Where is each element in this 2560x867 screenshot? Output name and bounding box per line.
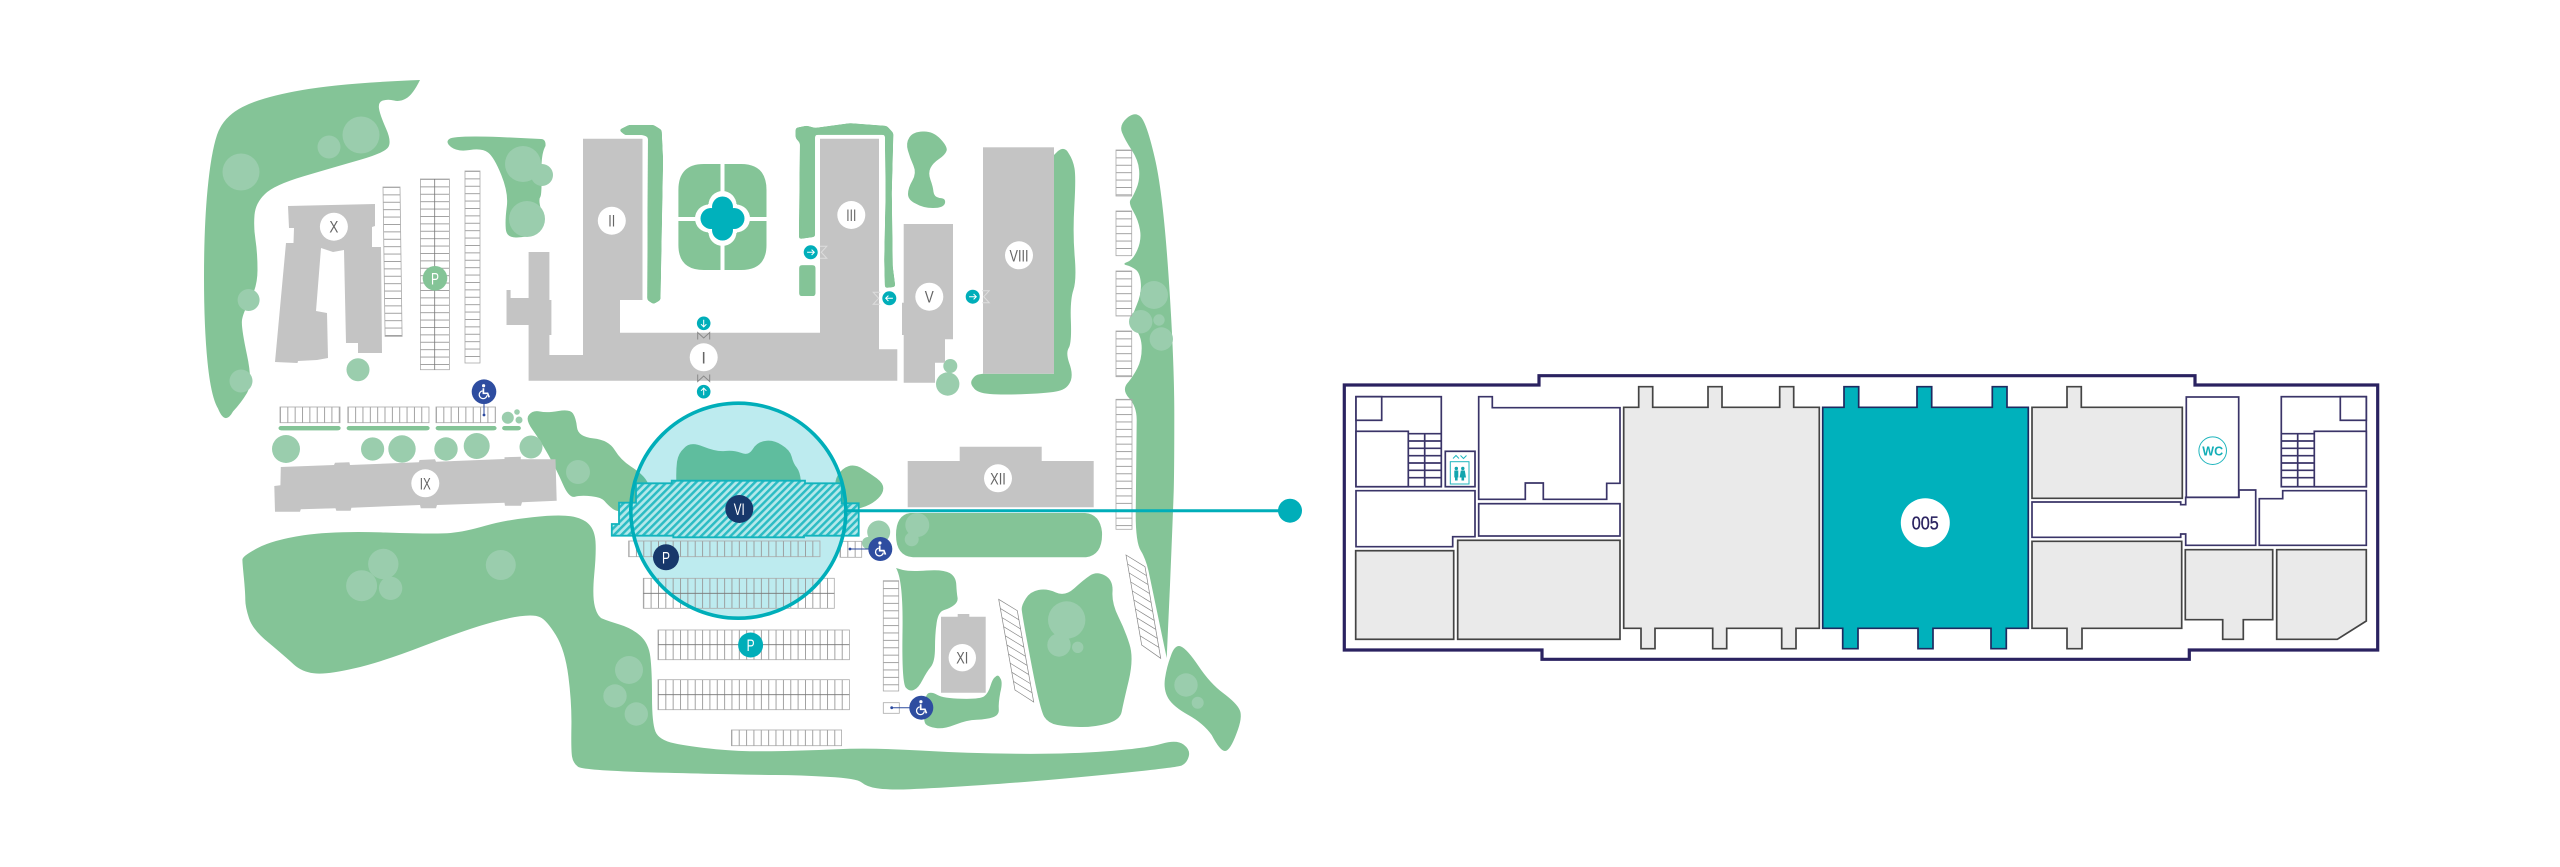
gate: south of building I — [697, 316, 710, 330]
WC label: WC — [2202, 444, 2223, 458]
green seen through the highlight circle — [633, 440, 844, 502]
parking lot east 5 — [1116, 399, 1132, 529]
highlight circle outline — [631, 403, 846, 618]
thin green strips — [278, 123, 895, 430]
label X — [320, 213, 348, 241]
label VIII — [1005, 241, 1033, 269]
parking lot A — [383, 187, 402, 336]
gate icons — [697, 245, 989, 399]
label XII: XII — [990, 470, 1006, 488]
trees — [222, 116, 1204, 726]
fountain garden quadrants — [678, 164, 766, 270]
green area: north-west park — [204, 80, 420, 418]
panel: campus site map — [204, 80, 1302, 789]
building V — [902, 224, 953, 383]
label V: V — [925, 289, 934, 307]
building XII — [908, 447, 1094, 507]
east corridor — [2032, 490, 2256, 545]
parking label teal — [738, 632, 763, 658]
gray room south — [1458, 540, 1620, 639]
green strip: around building III — [796, 123, 895, 288]
fountain water basin — [700, 196, 744, 240]
gray rooms — [1356, 387, 2366, 649]
small parking lot east of VI — [840, 541, 862, 557]
west stair room — [1356, 397, 1441, 487]
green area: between the parking lots — [448, 137, 546, 238]
building XI — [941, 614, 986, 693]
buildings I, II and III — [506, 139, 897, 381]
room label 005 — [1901, 498, 1950, 547]
gray buildings — [274, 139, 1094, 693]
parking lot B — [420, 179, 449, 370]
gray room east south — [2032, 541, 2182, 649]
fountain — [678, 164, 766, 270]
WC room — [2186, 397, 2239, 497]
gray hall — [1624, 387, 1819, 649]
corridor room west — [1479, 504, 1620, 536]
parking lot east 1 — [1116, 150, 1132, 196]
green area: far south-east — [1165, 646, 1241, 751]
gate: building VIII — [966, 290, 980, 304]
WC label — [2199, 437, 2226, 465]
building labels — [320, 201, 1033, 671]
green hedges north of building IX — [278, 426, 341, 430]
room label 005: 005 — [1912, 513, 1939, 533]
room north-west large — [1479, 397, 1620, 499]
green area: central south-east — [1022, 573, 1132, 727]
green area: west of XI — [896, 568, 958, 691]
parking south row — [731, 730, 842, 746]
elevator — [1445, 451, 1475, 487]
label VI: VI — [734, 501, 745, 519]
label VIII: VIII — [1010, 247, 1028, 265]
oblique parking lot east — [1126, 555, 1161, 658]
parking lot east 4 — [1116, 331, 1132, 377]
label I — [690, 343, 718, 371]
leader line end dot — [1278, 499, 1302, 523]
accessible marker near XI — [890, 696, 933, 720]
building X — [275, 204, 382, 363]
leader line to floor plan — [846, 509, 1290, 512]
label III — [837, 201, 865, 229]
parking lot east 3 — [1116, 271, 1132, 316]
label II — [598, 207, 626, 235]
parking lots — [280, 150, 1161, 746]
gate ribbon marks — [698, 332, 710, 382]
green area: north of V — [907, 131, 947, 208]
parking double row 3 — [658, 680, 849, 710]
parking lot north of IX, centre — [348, 407, 429, 423]
accessible marker east of VI — [849, 537, 892, 561]
panel: floor plan — [1344, 376, 2378, 659]
parking lot west of XI — [883, 581, 899, 691]
parking double row 2 — [658, 630, 849, 660]
oblique parking lot centre — [999, 599, 1034, 702]
parking lot east 2 — [1116, 211, 1132, 256]
label I: I — [701, 349, 706, 367]
label X: X — [329, 219, 338, 237]
highlighted room 005 — [1823, 387, 2028, 649]
parking label navy: P — [662, 549, 670, 567]
east stair room — [2281, 397, 2366, 487]
gate: building III west — [804, 245, 818, 259]
parking label teal: P — [747, 637, 755, 655]
building IX — [274, 457, 557, 512]
accessible marker north — [472, 379, 496, 416]
label IX — [411, 469, 439, 497]
green area: east strip — [1121, 114, 1174, 658]
green strip: beside building II — [619, 125, 663, 304]
building VI hatched — [612, 481, 859, 537]
white rooms — [1356, 397, 2366, 547]
large green areas — [204, 80, 1241, 789]
fountain white border — [695, 191, 750, 246]
gate: north of forecourt — [697, 385, 710, 399]
gray room south-west — [1356, 551, 1454, 639]
parking label green: P — [431, 270, 439, 288]
label XI: XI — [956, 650, 968, 668]
gray room chamfered — [2277, 550, 2366, 639]
parking row south of VI — [629, 541, 820, 557]
gray room east north — [2032, 387, 2182, 498]
label II: II — [608, 213, 615, 231]
label V — [915, 283, 943, 311]
green area: west of building VI — [528, 410, 653, 512]
green area: around building VIII — [971, 149, 1075, 394]
label VI — [725, 495, 753, 523]
green area: east of building VI — [835, 465, 883, 510]
room west middle — [1356, 491, 1475, 547]
parking label green — [423, 266, 447, 291]
green area: beside building XII — [896, 513, 1102, 557]
building VIII — [983, 147, 1054, 374]
gray room with alcove — [2185, 550, 2273, 639]
gate: building III east — [882, 291, 896, 305]
label XI — [949, 644, 976, 671]
green area: south-west park — [242, 515, 1189, 789]
parking lot C — [465, 171, 480, 363]
label IX: IX — [420, 475, 431, 493]
label XII — [984, 464, 1012, 492]
accessible parking markers — [472, 379, 933, 720]
small parking lot south-west of XI — [883, 703, 899, 713]
parking double row 1 — [643, 578, 834, 608]
label III: III — [846, 207, 856, 225]
parking label navy — [653, 544, 679, 570]
highlight circle fill — [630, 403, 846, 619]
green block: west of building III — [799, 265, 815, 296]
floor plan outer wall — [1344, 376, 2378, 659]
parking lot north of IX, west — [280, 407, 340, 423]
parking lot north of IX, east — [436, 407, 496, 423]
room east middle — [2259, 491, 2366, 545]
green area: south of XI — [924, 676, 1002, 728]
